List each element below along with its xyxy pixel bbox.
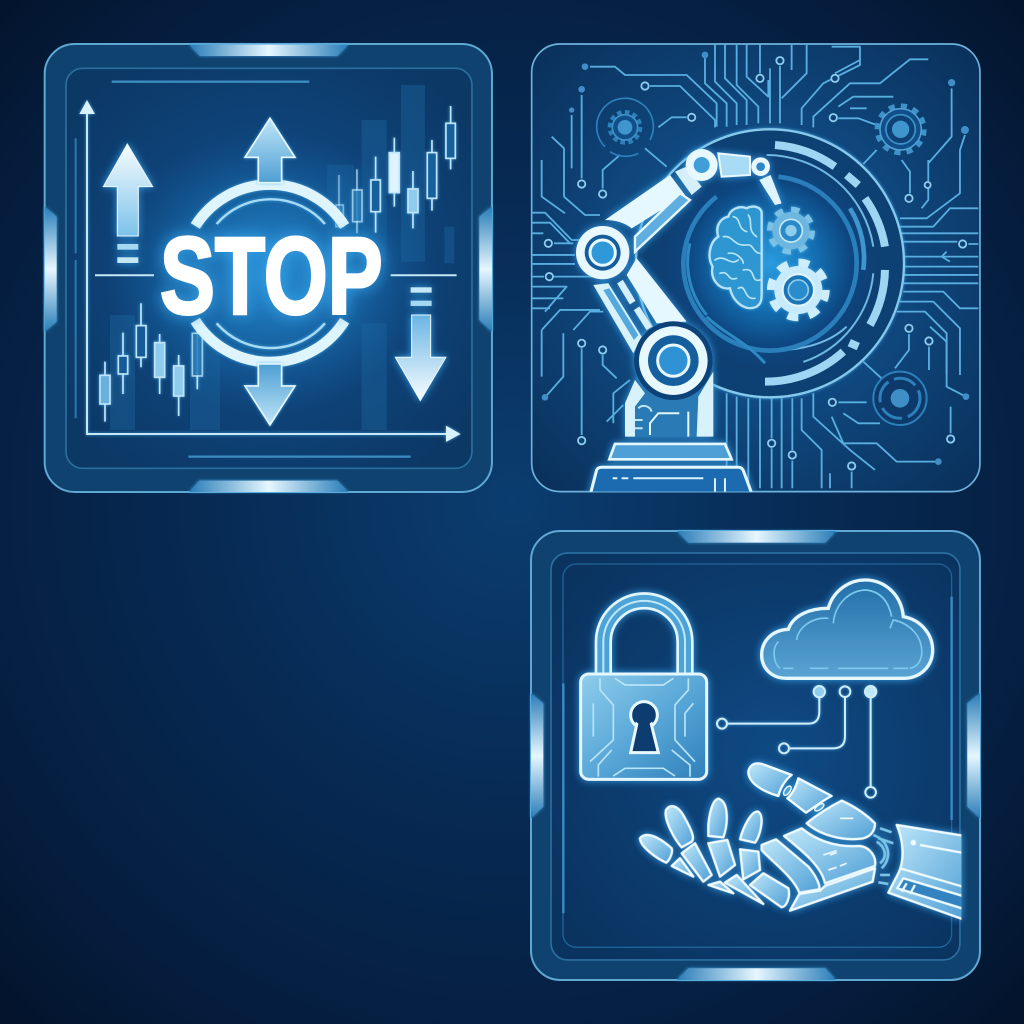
fingers	[640, 799, 763, 904]
center ring	[195, 185, 345, 362]
panel: robot arm and AI	[530, 44, 980, 493]
small gear top left	[597, 98, 653, 156]
candlesticks lower left	[100, 303, 202, 422]
joint: top	[686, 149, 718, 181]
small gear bottom right	[873, 372, 927, 425]
arm column	[625, 372, 713, 437]
connector lines	[717, 686, 876, 798]
gear lower	[772, 263, 825, 317]
circuit traces	[530, 45, 978, 488]
arrow: down right	[395, 287, 446, 401]
connector	[718, 153, 750, 177]
padlock	[581, 601, 707, 779]
forearm	[888, 825, 965, 920]
arrow: up left	[103, 144, 153, 263]
AI disc with rings	[636, 129, 904, 397]
small gear top right	[878, 107, 923, 152]
wrist	[873, 828, 893, 884]
joint: mid	[576, 226, 629, 279]
brain	[710, 207, 762, 308]
thumb	[748, 763, 832, 813]
cloud	[762, 580, 933, 678]
arm base	[591, 444, 752, 493]
palm	[750, 801, 875, 911]
robot arm	[576, 149, 782, 493]
upper arm	[605, 167, 702, 252]
panel: lock, cloud and robot hand	[531, 531, 980, 980]
arrow: center up	[245, 118, 295, 183]
panel: stop sign market chart	[45, 44, 492, 492]
joint: wrist and gripper	[751, 157, 782, 205]
arrow: center down	[245, 364, 295, 425]
gear upper	[770, 210, 812, 251]
lower arm	[593, 258, 687, 353]
title: STOP: STOP	[160, 214, 383, 337]
circuit nodes	[545, 57, 966, 470]
robot hand	[640, 763, 965, 920]
chart axes	[79, 100, 461, 442]
joint: large	[634, 321, 713, 400]
candlesticks upper right	[336, 106, 455, 233]
